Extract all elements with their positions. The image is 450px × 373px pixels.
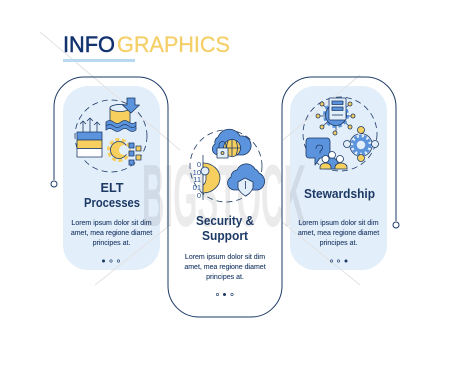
text block: right card	[298, 220, 379, 247]
text block: centre card: Lorem ipsum dolor sit dim	[185, 254, 265, 261]
text block: centre card	[184, 254, 266, 281]
heading: ELT Processes: ELT	[100, 180, 124, 195]
text block: left card	[71, 220, 152, 247]
binary digits: 0	[197, 191, 201, 200]
icon: ELT processes	[75, 98, 147, 172]
text block: right card: Lorem ipsum dolor sit dim	[298, 220, 379, 227]
title	[63, 32, 230, 57]
binary digits	[193, 160, 201, 200]
heading: ELT Processes second line: Processes	[84, 195, 140, 210]
title: GRAPHICS	[117, 32, 230, 57]
connector start node	[51, 181, 57, 187]
heading: Stewardship: Stewardship	[304, 186, 375, 201]
text block: left card: principes at.	[93, 240, 130, 247]
icon: security and support	[190, 129, 265, 202]
pagination dots: left card	[102, 260, 120, 262]
text block: left card: amet, mea regione diamet	[71, 230, 152, 237]
binary digits: 01	[193, 183, 201, 192]
binary digits: 0	[197, 160, 201, 169]
binary digits: 10	[193, 168, 201, 177]
heading: Support second line: Support	[202, 228, 249, 243]
connector outline running around all cards	[54, 77, 396, 317]
text block: centre card: principes at.	[206, 274, 244, 281]
text block: centre card: amet, mea regione diamet	[184, 264, 266, 271]
title underline	[63, 59, 135, 62]
text block: right card: principes at.	[320, 240, 357, 247]
binary digits: 11	[193, 175, 201, 184]
pagination dots: centre card	[216, 293, 233, 296]
icon: stewardship	[303, 97, 378, 171]
panel: left card background	[63, 86, 160, 270]
watermark	[40, 32, 360, 285]
connector end node	[393, 222, 399, 228]
heading: Security & Support: Security &	[196, 213, 254, 228]
pagination dots: right card	[330, 260, 347, 262]
text block: left card: Lorem ipsum dolor sit dim	[71, 220, 152, 227]
title: INFO	[63, 32, 115, 57]
text block: right card: amet, mea regione diamet	[298, 230, 379, 237]
panel: right card background	[290, 86, 387, 270]
